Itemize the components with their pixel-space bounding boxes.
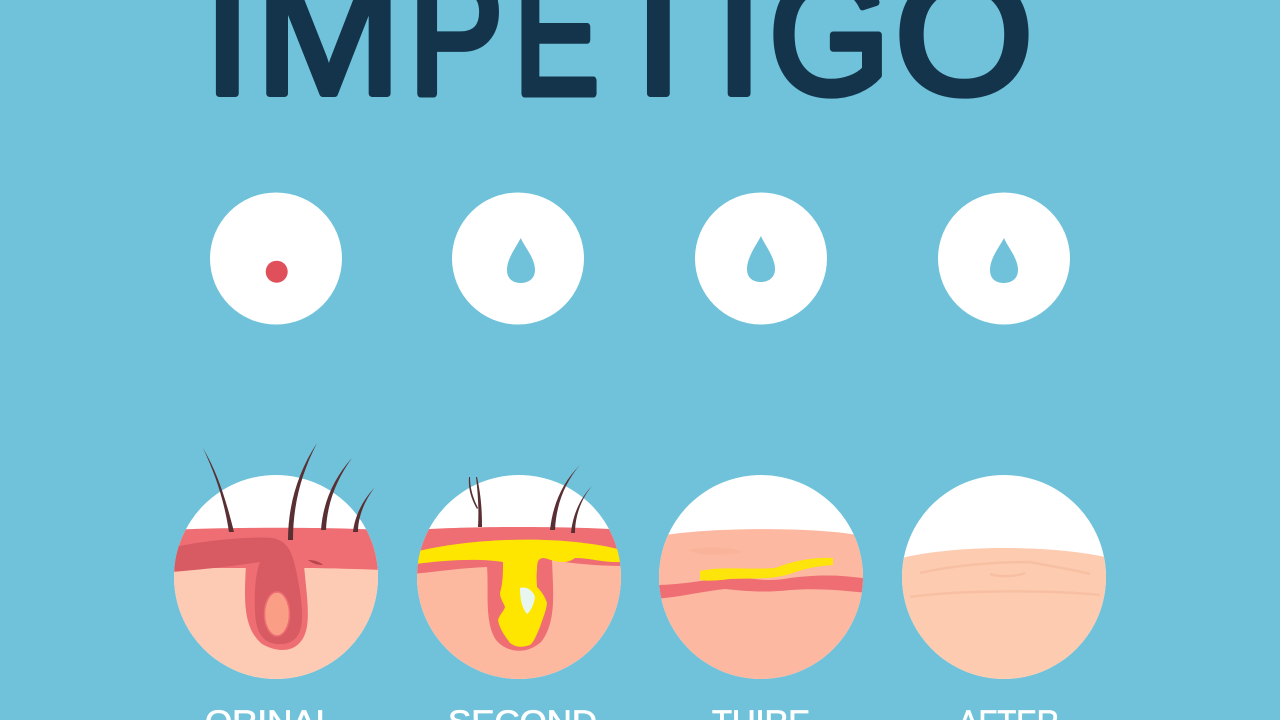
- icon: white circle with blister drop, second stage: [452, 192, 584, 324]
- skin diagram: second stage: [412, 465, 626, 685]
- hairs: [469, 465, 593, 533]
- icon: white circle with red dot: [210, 192, 342, 324]
- skin diagram: original stage: [170, 443, 382, 685]
- icon: white circle with blister drop, after stage: [938, 192, 1070, 324]
- infographic: impetigo stages: [174, 0, 1106, 720]
- title: [204, 0, 1033, 130]
- icon: white circle with blister drop, third stage: [695, 192, 827, 324]
- hairs: [203, 443, 375, 540]
- skin diagram: after stage: [898, 475, 1110, 685]
- skin diagram: third stage: [655, 475, 868, 685]
